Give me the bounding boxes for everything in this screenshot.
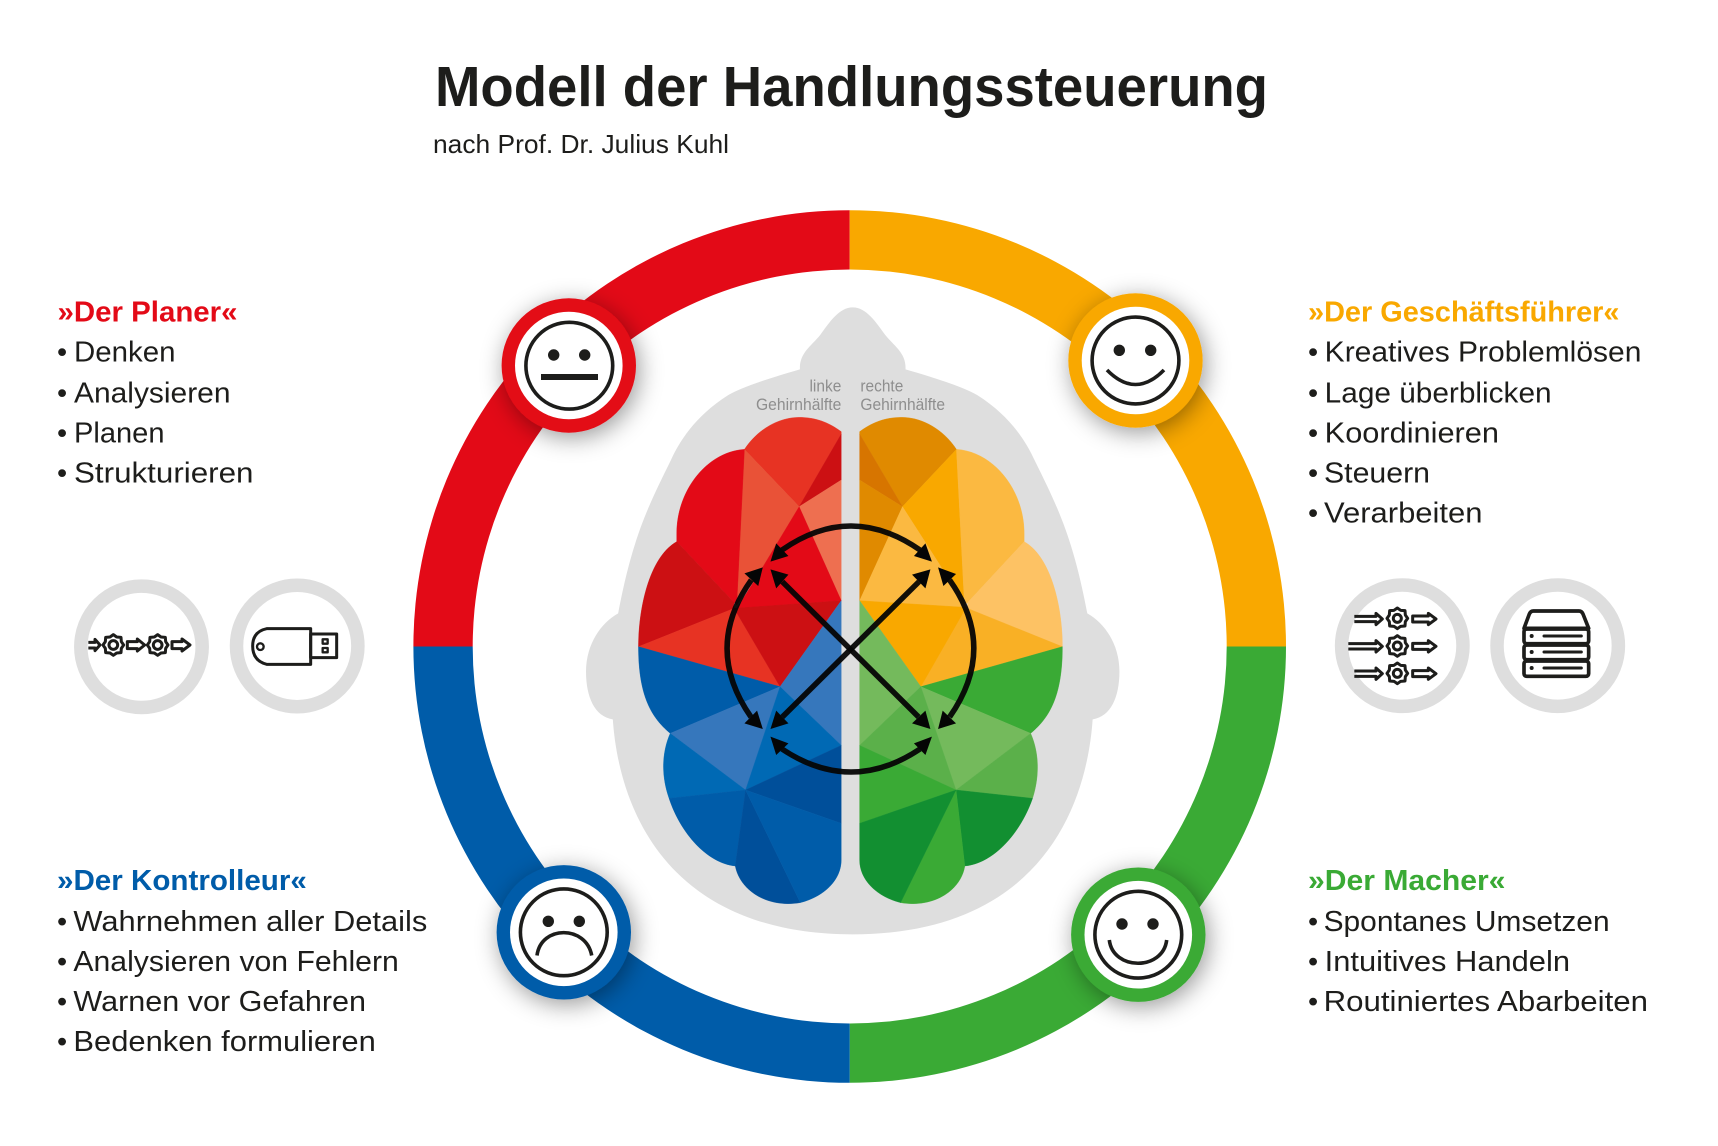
text block: Der Geschäftsführer: Steuern <box>1324 458 1430 490</box>
text block: Der Planer: Strukturieren <box>74 458 254 490</box>
right lower green lobe facets <box>860 601 1062 904</box>
text block: Der Macher: • <box>1308 906 1318 938</box>
text block: Der Kontrolleur: Analysieren von Fehlern <box>73 946 399 978</box>
brain: right hemisphere labels: rechte <box>860 377 903 396</box>
text block: Der Geschäftsführer: »Der Geschäftsführer« <box>1308 297 1620 329</box>
badge: neutral face (red) <box>502 298 636 433</box>
subtitle: nach Prof. Dr. Julius Kuhl <box>433 129 729 159</box>
text block: Der Kontrolleur <box>57 865 427 1058</box>
text block: Der Planer: • <box>57 458 67 490</box>
text block: Der Planer: • <box>57 418 67 450</box>
title: Modell der Handlungssteuerung <box>435 55 1268 119</box>
text block: Der Kontrolleur: • <box>57 1026 67 1058</box>
text block: Der Planer <box>57 297 254 490</box>
brain: coloured facets <box>638 417 1062 904</box>
text block: Der Planer: • <box>57 378 67 410</box>
text block: Der Macher: • <box>1308 946 1318 978</box>
text block: Der Kontrolleur: Bedenken formulieren <box>73 1026 376 1058</box>
text block: Der Kontrolleur: • <box>57 906 67 938</box>
text block: Der Geschäftsführer: Kreatives Problemlösen <box>1325 337 1641 369</box>
arrows between brain quadrants <box>727 526 974 772</box>
text block: Der Geschäftsführer: • <box>1308 458 1318 490</box>
text block: Der Kontrolleur: Warnen vor Gefahren <box>73 986 366 1018</box>
brain: left hemisphere labels: linke <box>810 377 841 396</box>
icon: gears and arrows in a row <box>81 586 202 708</box>
text block: Der Macher: Intuitives Handeln <box>1325 946 1570 978</box>
text block: Der Geschäftsführer: • <box>1308 418 1318 450</box>
text block: Der Kontrolleur: »Der Kontrolleur« <box>57 865 307 897</box>
brain: right hemisphere labels: Gehirnhälfte <box>860 395 945 414</box>
text block: Der Kontrolleur: Wahrnehmen aller Details <box>73 906 427 938</box>
text block: Der Planer: »Der Planer« <box>58 297 238 329</box>
ring: four coloured quadrants <box>413 210 1286 1083</box>
badge: slight smile (orange) <box>1068 293 1203 428</box>
text block: Der Kontrolleur: • <box>57 986 67 1018</box>
text block: Der Geschäftsführer: • <box>1308 337 1318 369</box>
text block: Der Macher: • <box>1308 986 1318 1018</box>
right upper orange lobe facets <box>860 417 1062 687</box>
brain: right hemisphere labels <box>860 377 945 414</box>
text block: Der Macher <box>1308 865 1648 1018</box>
brain: left hemisphere labels <box>756 377 841 414</box>
badge: sad face (blue) <box>497 865 631 1000</box>
left lower blue lobe facets <box>638 601 841 904</box>
brain: left hemisphere labels: Gehirnhälfte <box>756 395 841 414</box>
text block: Der Macher: »Der Macher« <box>1308 865 1506 897</box>
badge: big smile (green) <box>1071 868 1206 1002</box>
text block: Der Planer: Denken <box>74 337 176 369</box>
text block: Der Planer: Analysieren <box>74 378 230 410</box>
head silhouette <box>586 307 1119 934</box>
text block: Der Geschäftsführer <box>1308 297 1641 530</box>
text block: Der Geschäftsführer: Koordinieren <box>1325 418 1499 450</box>
text block: Der Geschäftsführer: • <box>1308 498 1318 530</box>
text block: Der Geschäftsführer: Verarbeiten <box>1324 498 1482 530</box>
text block: Der Macher: Routiniertes Abarbeiten <box>1324 986 1648 1018</box>
text block: Der Planer: Planen <box>74 418 164 450</box>
text block: Der Planer: • <box>57 337 67 369</box>
text block: Der Geschäftsführer: Lage überblicken <box>1325 378 1552 410</box>
icon: usb stick <box>237 585 358 707</box>
icon: server stack <box>1497 585 1618 706</box>
text block: Der Geschäftsführer: • <box>1308 378 1318 410</box>
text block: Der Macher: Spontanes Umsetzen <box>1324 906 1610 938</box>
icon: three process rows with gears <box>1342 585 1463 706</box>
left upper red lobe facets <box>638 417 841 687</box>
text block: Der Kontrolleur: • <box>57 946 67 978</box>
